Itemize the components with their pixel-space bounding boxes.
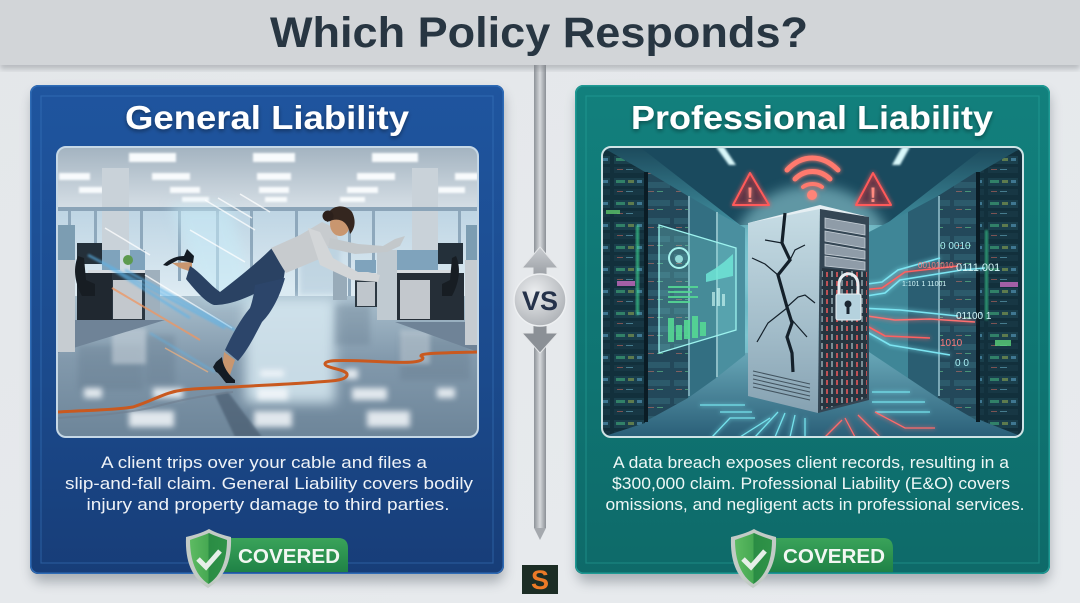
ceiling lights [59, 153, 478, 202]
window frames and columns [57, 168, 478, 296]
icon: wifi alert [787, 158, 838, 200]
woman [163, 206, 405, 383]
logo mark: S [531, 565, 549, 595]
icon: warning right [856, 173, 891, 207]
arm far [328, 236, 405, 254]
front shoe [213, 357, 235, 383]
right racks [869, 147, 1023, 437]
title: Which Policy Responds? [270, 9, 808, 57]
head [330, 220, 349, 236]
vs badge: VS [522, 286, 558, 316]
heading: professional liability: Professional Liability [631, 99, 994, 136]
arrow: up [522, 247, 558, 285]
description text: slip-and-fall claim. General Liability covers bodily [65, 474, 474, 493]
image frame [602, 147, 1023, 437]
crack [778, 213, 793, 372]
covered badge [731, 529, 893, 588]
heading: general liability: General Liability [125, 99, 410, 136]
binary labels [902, 241, 1000, 369]
description text: $300,000 claim. Professional Liability (E&O) covers [612, 474, 1010, 493]
illustration: breached server in data centre [602, 147, 1023, 437]
covered badge [186, 529, 348, 588]
binary labels: 1:101 1 11001 [902, 281, 946, 288]
front leg [225, 278, 285, 361]
data streams [860, 258, 985, 355]
icon: warning left [733, 173, 769, 207]
icon: warning left: ! [746, 184, 754, 207]
title banner [0, 0, 1080, 69]
panel: general liability [30, 85, 504, 588]
description text: injury and property damage to third parties. [86, 495, 450, 514]
torso [271, 222, 338, 273]
icon: shield check [186, 529, 231, 588]
illustration: woman tripping over cable in office [57, 147, 478, 437]
binary labels: 01100 1 [956, 311, 992, 322]
icon: padlock [836, 274, 861, 320]
back leg skin [172, 262, 192, 272]
vent [753, 371, 810, 400]
logo mark [522, 565, 558, 595]
covered badge: COVERED [238, 546, 340, 568]
icon: warning right: ! [870, 184, 876, 207]
vs badge [514, 274, 566, 326]
left racks [602, 147, 745, 437]
covered badge: COVERED [783, 546, 885, 568]
description text: omissions, and negligent acts in professional services. [606, 495, 1024, 514]
back shoe [163, 249, 194, 266]
woman's floor reflection [215, 392, 262, 437]
description text: A client trips over your cable and files a [101, 453, 428, 472]
image frame [57, 147, 478, 437]
binary labels: 0 0010 [940, 241, 971, 252]
binary labels: 1010 [940, 338, 963, 349]
holographic dashboard [659, 225, 736, 353]
back leg and hips [186, 248, 285, 305]
desks right [333, 225, 478, 345]
server tower [748, 205, 869, 413]
binary labels: 0 0 [955, 358, 969, 369]
desks left [57, 225, 160, 352]
description text [65, 453, 474, 514]
description text: A data breach exposes client records, resulting in a [613, 453, 1010, 472]
speed lines [88, 194, 270, 372]
description text [606, 453, 1024, 514]
floor [602, 350, 1023, 437]
arm near [308, 228, 380, 282]
ceiling lights [716, 147, 736, 165]
binary labels: 0111 001 [956, 262, 1000, 274]
icon: shield check [731, 529, 776, 588]
front foot skin [222, 352, 235, 375]
panel: professional liability [575, 85, 1050, 588]
floor [57, 296, 478, 437]
cable [58, 352, 477, 418]
binary labels: 00101010 [918, 261, 954, 270]
vertical divider with VS badge [514, 62, 566, 540]
arrow: down [522, 315, 558, 353]
circuit traces [700, 392, 935, 437]
